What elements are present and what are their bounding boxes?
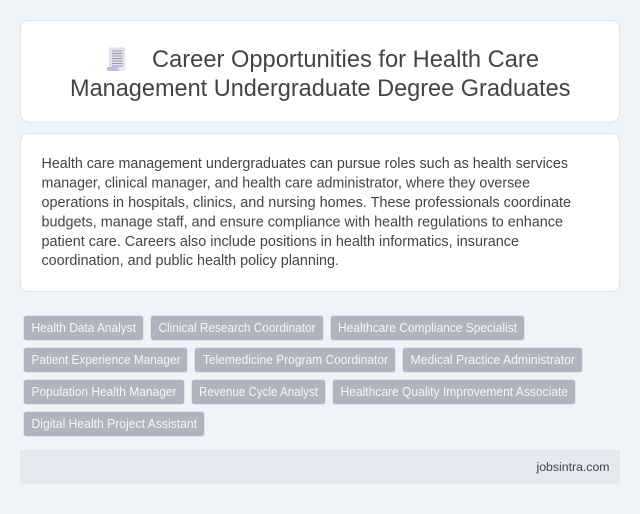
tag: Telemedicine Program Coordinator: Telemedicine Program Coordinator bbox=[203, 353, 388, 367]
tag: Digital Health Project Assistant bbox=[24, 412, 204, 436]
tag: Healthcare Quality Improvement Associate: Healthcare Quality Improvement Associate bbox=[340, 385, 568, 399]
description text: operations in hospitals, clinics, and nursing homes. These professionals coordinate bbox=[42, 195, 571, 211]
panel: title card bbox=[20, 20, 620, 122]
tag: Health Data Analyst bbox=[24, 316, 144, 340]
tag: Patient Experience Manager: Patient Experience Manager bbox=[32, 353, 180, 367]
tag: Healthcare Compliance Specialist: Healthcare Compliance Specialist bbox=[338, 321, 517, 335]
description text bbox=[42, 156, 571, 269]
tag: Medical Practice Administrator bbox=[402, 348, 582, 372]
tag list bbox=[24, 316, 582, 436]
footer bbox=[20, 450, 620, 484]
tag: Medical Practice Administrator: Medical Practice Administrator bbox=[410, 353, 575, 367]
tag: Clinical Research Coordinator bbox=[150, 316, 324, 340]
description text: Health care management undergraduates can pursue roles such as health services bbox=[42, 156, 568, 172]
panel: description card bbox=[20, 134, 620, 292]
tag: Digital Health Project Assistant: Digital Health Project Assistant bbox=[32, 417, 197, 431]
tag: Health Data Analyst: Health Data Analyst bbox=[32, 321, 136, 335]
description text: coordination, and public health policy planning. bbox=[42, 253, 339, 269]
tag: Patient Experience Manager bbox=[24, 348, 188, 372]
tag: Revenue Cycle Analyst: Revenue Cycle Analyst bbox=[199, 385, 318, 399]
tag: Revenue Cycle Analyst bbox=[192, 380, 326, 404]
tag: Healthcare Compliance Specialist bbox=[330, 316, 524, 340]
description text: budgets, manage staff, and ensure compliance with health regulations to enhance bbox=[42, 214, 563, 230]
description text: manager, clinical manager, and health care administrator, where they oversee bbox=[42, 176, 530, 192]
tag: Population Health Manager bbox=[24, 380, 184, 404]
tag: Telemedicine Program Coordinator bbox=[194, 348, 396, 372]
title bbox=[70, 46, 570, 102]
title: Management Undergraduate Degree Graduates bbox=[70, 75, 570, 102]
description text: patient care. Careers also include positions in health informatics, insurance bbox=[42, 234, 519, 250]
icon: receipt bbox=[107, 47, 126, 71]
tag: Healthcare Quality Improvement Associate bbox=[332, 380, 576, 404]
tag: Population Health Manager: Population Health Manager bbox=[32, 385, 176, 399]
tag: Clinical Research Coordinator: Clinical Research Coordinator bbox=[158, 321, 316, 335]
footer: jobsintra.com bbox=[535, 460, 610, 474]
title: Career Opportunities for Health Care bbox=[152, 46, 539, 73]
